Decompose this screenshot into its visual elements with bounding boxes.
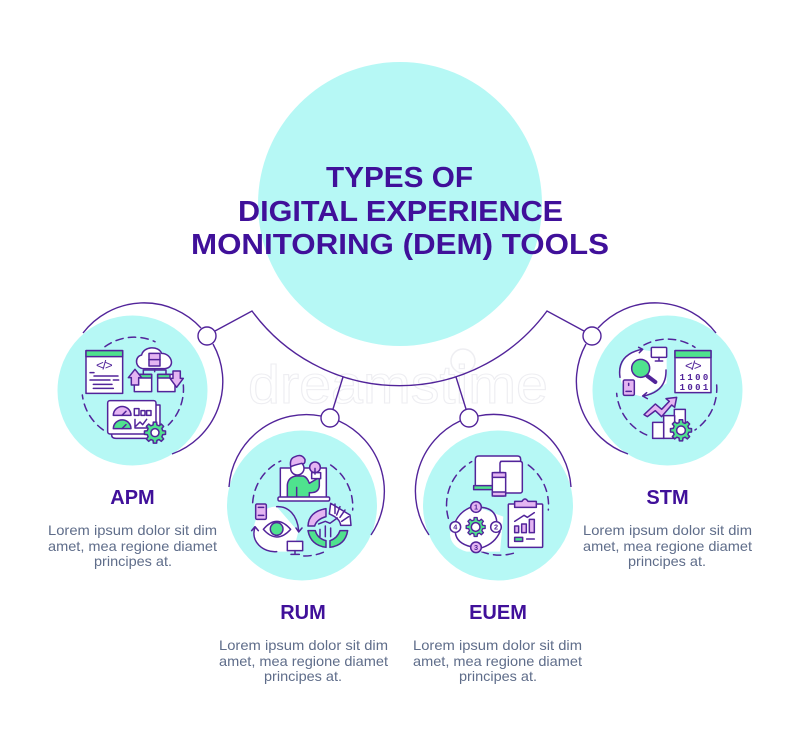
- icon: APM application code, cloud and dashboard: [82, 337, 183, 443]
- text block: APM: principes at.: [94, 553, 172, 569]
- text block: EUEM: [413, 602, 582, 684]
- panel: RUM: [227, 409, 384, 580]
- icon: STM search cycle, binary code and growth chart: 1001: [680, 383, 709, 393]
- EUEM node: [460, 409, 478, 427]
- text block: RUM: RUM: [280, 602, 326, 624]
- text block: APM: amet, mea regione diamet: [48, 538, 217, 554]
- STM node: [583, 327, 601, 345]
- icon: EUEM devices, process cycle and report: 2: [494, 523, 498, 532]
- APM node: [198, 327, 216, 345]
- STM ring: [576, 303, 716, 454]
- title: TYPES OF: [326, 162, 473, 194]
- connector arc: [215, 311, 584, 409]
- icon: APM application code, cloud and dashboard: </>: [96, 357, 113, 372]
- text block: STM: principes at.: [628, 553, 706, 569]
- watermark: dreamstime: [248, 355, 548, 415]
- panel: EUEM: [415, 409, 573, 580]
- text block: EUEM: Lorem ipsum dolor sit dim: [413, 637, 582, 653]
- APM ring: [83, 303, 223, 454]
- icon: EUEM devices, process cycle and report: 3: [474, 543, 478, 552]
- icon: STM search cycle, binary code and growth chart: 1100: [680, 373, 708, 383]
- icon: STM search cycle, binary code and growth chart: </>: [685, 358, 702, 373]
- EUEM ring: [415, 414, 571, 535]
- icon: EUEM devices, process cycle and report: [447, 456, 549, 555]
- panel: APM: [58, 303, 223, 466]
- title: MONITORING (DEM) TOOLS: [191, 229, 609, 261]
- text block: APM: [48, 487, 217, 569]
- title: DIGITAL EXPERIENCE: [238, 196, 563, 228]
- text block: APM: APM: [110, 487, 155, 509]
- EUEM disc: [423, 430, 573, 580]
- text block: STM: Lorem ipsum dolor sit dim: [583, 522, 752, 538]
- text block: RUM: Lorem ipsum dolor sit dim: [219, 637, 388, 653]
- text block: RUM: amet, mea regione diamet: [219, 653, 388, 669]
- text block: EUEM: amet, mea regione diamet: [413, 653, 582, 669]
- central circle: [258, 62, 542, 346]
- icon: RUM user, eye cycle and charts: [252, 455, 353, 556]
- icon: STM search cycle, binary code and growth chart: [617, 339, 717, 441]
- title: [191, 162, 609, 261]
- panel: STM: [576, 303, 742, 466]
- RUM node: [321, 409, 339, 427]
- text block: EUEM: principes at.: [459, 668, 537, 684]
- icon: EUEM devices, process cycle and report: 1: [474, 503, 478, 512]
- text block: EUEM: EUEM: [469, 602, 527, 624]
- text block: STM: [583, 487, 752, 569]
- text block: RUM: [219, 602, 388, 684]
- text block: APM: Lorem ipsum dolor sit dim: [48, 522, 217, 538]
- RUM ring: [229, 415, 384, 535]
- RUM disc: [227, 430, 377, 580]
- text block: STM: STM: [646, 487, 689, 509]
- text block: RUM: principes at.: [264, 668, 342, 684]
- APM disc: [58, 316, 208, 466]
- STM disc: [592, 316, 742, 466]
- text block: STM: amet, mea regione diamet: [583, 538, 752, 554]
- icon: EUEM devices, process cycle and report: 4: [453, 523, 458, 532]
